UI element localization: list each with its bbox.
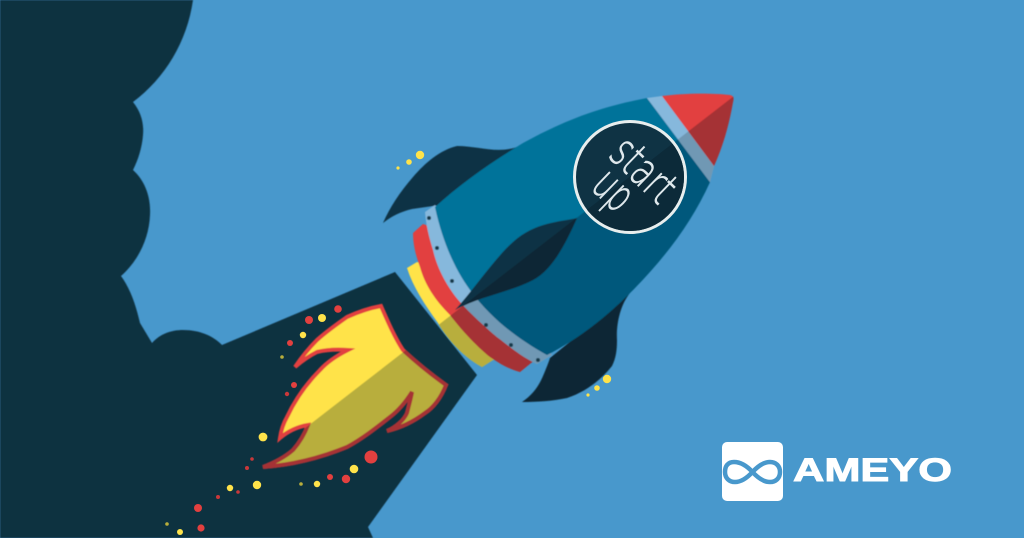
left fin xyxy=(383,146,517,223)
rocket body xyxy=(435,98,710,355)
right fin xyxy=(522,293,630,402)
rivets xyxy=(427,216,540,362)
start up badge xyxy=(574,122,689,232)
riveted band xyxy=(425,205,552,364)
rocket xyxy=(383,94,734,402)
flame xyxy=(263,306,446,467)
nose cone xyxy=(662,94,734,166)
nose band xyxy=(647,96,714,182)
badge text: start: start xyxy=(599,125,689,214)
wordmark: AMEYO xyxy=(793,452,952,488)
logo: Ameyo xyxy=(722,442,952,501)
smoke cloud and exhaust trail xyxy=(0,0,477,538)
sparkles near left fin xyxy=(396,151,424,170)
red band xyxy=(413,224,545,372)
badge text: up: up xyxy=(582,157,647,222)
yellow band xyxy=(407,262,510,367)
sparks xyxy=(165,305,378,535)
center fin xyxy=(455,218,577,310)
sparkles near right fin xyxy=(586,375,611,397)
icon: infinity xyxy=(722,442,783,501)
